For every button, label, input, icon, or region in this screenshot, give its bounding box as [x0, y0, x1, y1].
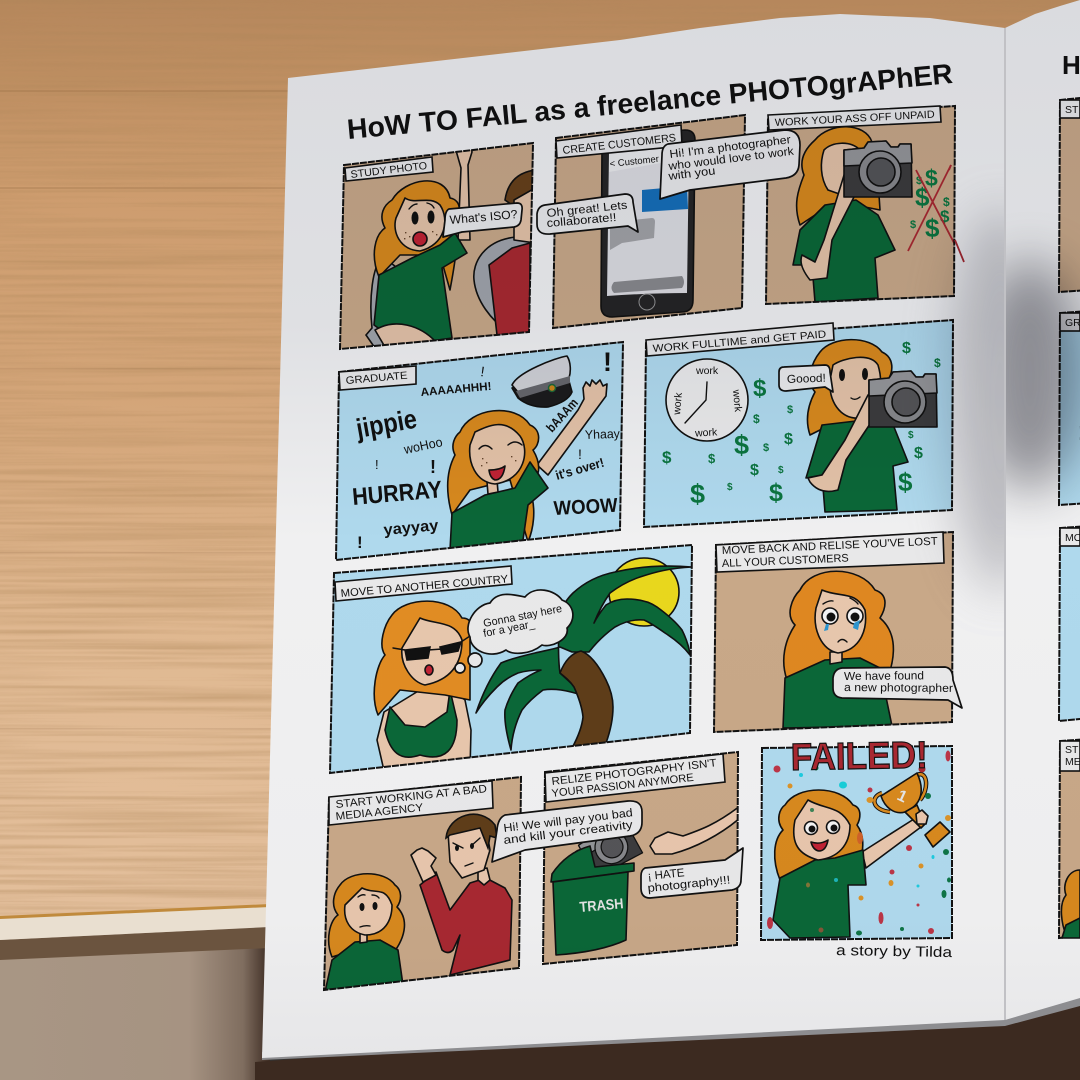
phone: < Customer [609, 154, 659, 170]
speech bubble [443, 203, 522, 237]
crossed out dollars: $ [940, 207, 950, 226]
speech bubble: We have found [844, 670, 924, 683]
panel: relize photography isn't your passion [543, 752, 743, 964]
speech bubble: collaborate [537, 194, 638, 234]
panel: move back [714, 532, 962, 732]
shouted words: AAAAAHHH! [420, 381, 492, 399]
dollars: $ [914, 445, 923, 462]
speech bubble: Hi! We will pay you bad [503, 807, 633, 835]
dollars: $ [778, 465, 784, 476]
thought bubble: for a year_ [482, 618, 536, 640]
shirt [793, 200, 895, 302]
thought bubble: Gonna stay here [482, 603, 563, 630]
crossed out dollars: $ [925, 213, 940, 243]
shirt [806, 417, 908, 512]
speech bubble: photographer [660, 130, 800, 199]
sun [609, 558, 679, 626]
caption [545, 754, 725, 802]
next page: partial title and panels [1059, 50, 1080, 938]
trash bin with camera: TRASH [579, 896, 624, 916]
trophy [874, 766, 950, 847]
shouted words: ! [603, 347, 612, 377]
arm [650, 806, 740, 854]
caption: WORK YOUR ASS OFF UNPAID [775, 109, 935, 129]
dollars: $ [784, 431, 793, 448]
hair [797, 127, 880, 225]
bikini [385, 690, 457, 757]
crossed out dollars: $ [915, 182, 930, 212]
speech bubble [492, 801, 642, 862]
next page: partial title and panels: ST [1065, 744, 1079, 756]
arm [808, 395, 876, 491]
dollars: $ [727, 482, 733, 493]
speech bubble: photographer: who would love to work [667, 146, 795, 173]
shouted words: ! [578, 446, 582, 462]
raised arm [455, 140, 472, 240]
crossed out dollars: $ [925, 165, 938, 191]
panel: graduate [336, 342, 623, 560]
shouted words: ! [357, 533, 363, 552]
dollars: $ [662, 448, 672, 467]
crying eyes [822, 598, 863, 642]
body [377, 688, 471, 775]
caption: ALL YOUR CUSTOMERS [722, 552, 849, 570]
shouted words: Yhaay [585, 427, 621, 442]
phone [601, 130, 695, 317]
shouted words: jippie [353, 404, 419, 444]
shouted words: ! [480, 363, 486, 380]
clock: work [695, 365, 719, 377]
page shading [250, 0, 1080, 1080]
dollars: $ [763, 442, 769, 454]
shouted words: ! [375, 457, 379, 472]
caption: START WORKING AT A BAD [335, 783, 488, 811]
dollars: $ [787, 404, 793, 416]
seat [365, 264, 398, 346]
caption [329, 781, 493, 825]
caption [646, 323, 834, 356]
shirt [783, 658, 892, 728]
palm trunk [560, 651, 613, 748]
speech bubble: and kill your creativity [503, 819, 634, 847]
crossed out dollars: $ [943, 195, 950, 209]
face [395, 198, 445, 251]
crossed out dollars [907, 164, 954, 252]
speech bubble: photographer: with you [667, 165, 716, 183]
panel: move to another country [330, 545, 692, 775]
dollars: $ [769, 479, 783, 507]
shouted words: HURRAY [351, 476, 443, 511]
man [411, 814, 512, 975]
arm [862, 819, 925, 868]
speech bubble [779, 365, 833, 392]
speech bubble: photographer: Hi! I'm a photographer [669, 134, 792, 161]
camera [844, 141, 912, 197]
caption [335, 566, 512, 601]
clock: work [671, 391, 685, 416]
speech bubble: collaborate: collaborate!! [546, 212, 617, 230]
speech bubble: What's ISO? [449, 207, 518, 227]
girl [325, 874, 404, 992]
clock: work [694, 426, 718, 440]
speech bubble: photography!!! [647, 874, 731, 895]
caption: MOVE BACK AND RELISE YOU'VE LOST [722, 536, 938, 557]
caption: STUDY PHOTO [350, 160, 428, 181]
classmate and seat [474, 170, 535, 335]
caption: CREATE CUSTOMERS [562, 132, 677, 157]
palm leaves [476, 566, 692, 750]
speech bubble: a new photographer [844, 682, 953, 695]
dollars [662, 340, 941, 509]
caption: YOUR PASSION ANYMORE [551, 772, 694, 800]
speech bubble [641, 848, 743, 898]
panel: create customers [537, 115, 800, 328]
panel: work your ass off unpaid [766, 106, 964, 304]
face [794, 800, 850, 860]
caption [339, 366, 416, 390]
panel: work fulltime and get paid [644, 320, 953, 527]
FAILED heading: FAILED! [790, 735, 928, 779]
panel: bad media agency [324, 777, 642, 992]
dollars: $ [708, 451, 716, 466]
magazine page edges [262, 990, 1080, 1060]
caption: MOVE TO ANOTHER COUNTRY [340, 573, 509, 600]
arm [801, 172, 855, 280]
shirt [450, 462, 548, 550]
caption: WORK FULLTIME and GET PAID [652, 328, 827, 355]
caption: RELIZE PHOTOGRAPHY ISN'T [551, 757, 718, 788]
dollars: $ [750, 462, 759, 479]
panel: study photo [340, 140, 535, 349]
hair [374, 181, 459, 290]
caption: GRADUATE [345, 370, 408, 387]
next page: partial title and panels: ST [1065, 104, 1079, 116]
title: HoW TO FAIL as a freelance PHOTOgrAPhER [346, 58, 954, 145]
hair [808, 340, 892, 435]
dollars: $ [753, 412, 760, 426]
speech bubble [833, 667, 962, 708]
clock: work [730, 388, 744, 413]
caption: MEDIA AGENCY [335, 802, 425, 823]
crossed out dollars: $ [910, 219, 916, 231]
arm [537, 380, 607, 475]
hair [448, 411, 539, 542]
shouted words: it's over! [554, 455, 606, 483]
confetti [767, 750, 951, 936]
shirt [374, 233, 467, 345]
shouted words: ! [430, 457, 436, 477]
shouted words: bAAAm [543, 395, 581, 435]
camera [869, 371, 937, 427]
dollars: $ [734, 430, 749, 460]
face [821, 143, 862, 197]
credit: a story by Tilda [836, 943, 953, 961]
magazine pages [250, 0, 1080, 1080]
speech bubble: ¡ HATE [647, 867, 685, 883]
crossed out dollars: $ [916, 175, 922, 187]
shouted words [351, 347, 621, 552]
dollars: $ [753, 375, 767, 402]
face [402, 618, 462, 685]
speech bubble: Goood! [787, 373, 826, 386]
dollars: $ [898, 467, 913, 497]
graduation cap [512, 356, 572, 407]
dollars: $ [908, 430, 914, 441]
shouted words: yayyay [383, 517, 440, 539]
dollars: $ [690, 479, 705, 509]
trash bin with camera [551, 814, 643, 955]
shirt [773, 850, 866, 938]
table edge and floor [0, 904, 1080, 1080]
neck and face [487, 480, 498, 494]
trophy: 1 [894, 787, 910, 806]
caption [716, 532, 944, 572]
dollars: $ [934, 356, 941, 370]
hair [374, 601, 472, 715]
sunglasses [405, 642, 461, 660]
face [830, 357, 881, 418]
clock [666, 359, 748, 441]
shouted words: woHoo [402, 434, 444, 457]
dollars: $ [902, 340, 911, 357]
leg [375, 324, 436, 347]
thought bubble [455, 590, 573, 673]
panel: failed [761, 735, 952, 940]
neck and face [830, 652, 842, 664]
speech bubble: collaborate: Oh great! Lets [546, 200, 628, 220]
shouted words: WOOW [553, 495, 618, 520]
hair [775, 790, 863, 880]
hair [784, 571, 893, 690]
